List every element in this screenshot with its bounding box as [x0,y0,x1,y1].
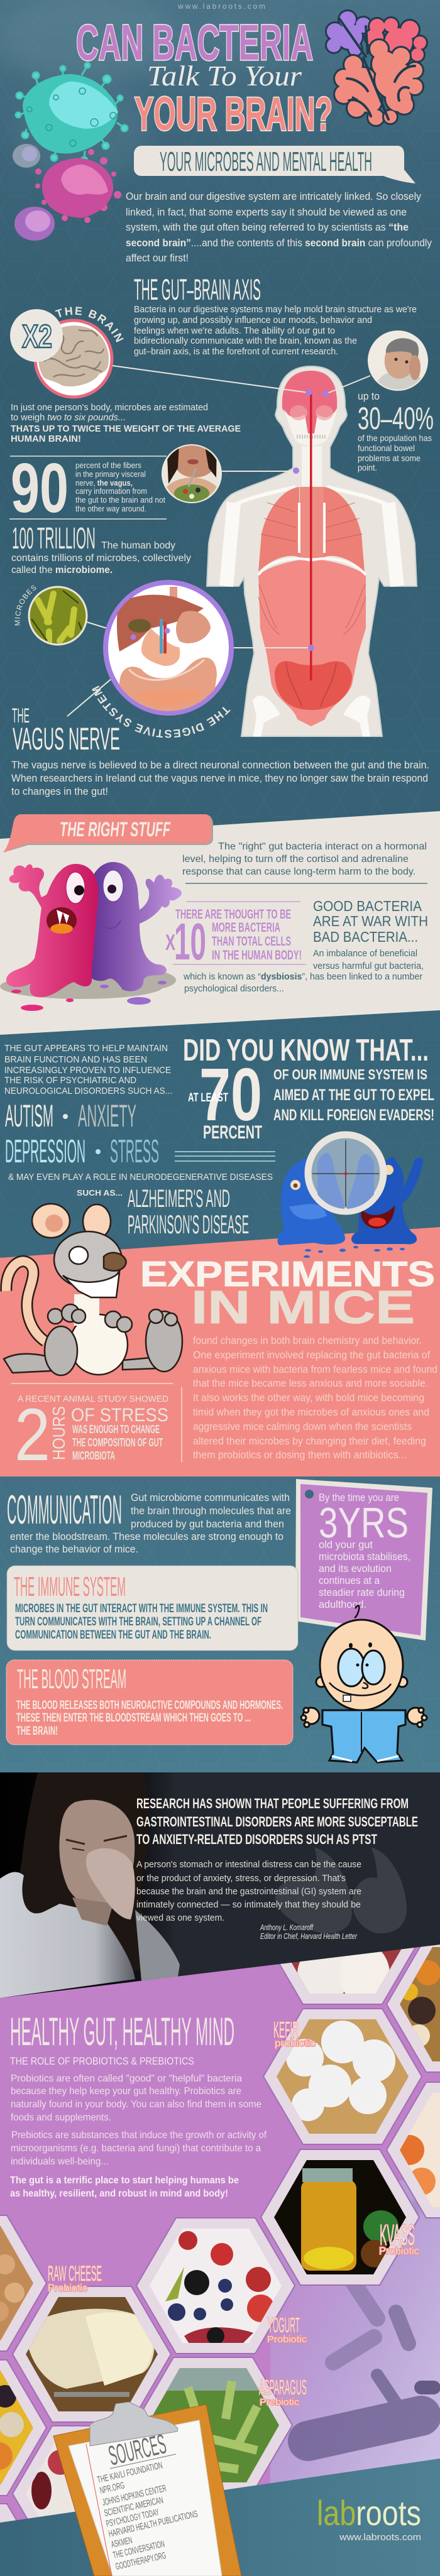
probiotics text: individuals well-being... [11,2156,109,2167]
stat: x10 more bacteria: THERE ARE THOUGHT TO BE [175,907,291,922]
limbs [4,1354,50,1373]
sources list: GOODTHERAPY.ORG [114,2550,167,2572]
quote text [136,1859,361,1923]
stat: 2 hours of stress: OF STRESS [71,1405,168,1426]
quote text: or the product of anxiety, stress, or depression. That's [136,1873,346,1884]
food labels: ASPARAGUS [259,2376,307,2399]
good vs bad bacteria: BAD BACTERIA... [313,929,418,945]
stat: 90 percent: the gut to the brain and not [75,496,166,505]
right blue monster [351,1156,423,1244]
panel: foods and probiotics background [0,1945,440,2523]
text: STRESS [110,1133,159,1170]
intro text: system, with the gut often being referred to by scientists as “the [126,221,409,233]
stat: 2 hours of stress: 2 [14,1394,50,1476]
intro text: linked, in fact, that some experts say it should be viewed as one [126,206,407,218]
sources list: SCIENTIFIC AMERICAN [103,2495,164,2519]
neck [72,1897,113,1926]
gut-brain axis text: bidirectionally communicate with the brain, known as the [134,336,357,346]
divider bottom [9,518,167,520]
communication text: change the behavior of mice. [10,1544,138,1555]
food labels: RAW CHEESE [48,2262,102,2286]
stat: 90 percent: nerve, the vagus, [75,479,133,488]
brain photo circle [35,320,112,397]
sources list: HARVARD HEALTH PUBLICATIONS [107,2509,199,2540]
stat: 2 hours of stress [14,1394,168,1476]
research headline [136,1796,418,1847]
metal clip [90,2402,178,2446]
mouse illustration [4,1204,182,1375]
quote text: intimately connected — so intimately that they should be [136,1899,361,1910]
vagus nerve line [310,394,312,680]
food hexagons [0,1869,440,2576]
intro text: affect our first! [126,252,189,264]
card: the blood stream: THE BRAIN! [16,1725,58,1738]
quote attribution: Editor in Chief, Harvard Health Letter [260,1931,357,1941]
hexagon: salad lower left [0,2360,47,2496]
stat: at least 70 percent [188,1053,262,1143]
title line 2 script: Talk To Your [147,60,302,92]
gut and disorders text [4,1044,172,1096]
logo: labroots: labroots [317,2493,421,2533]
experiments text: that the mice became less anxious and more sociable. [193,1378,428,1389]
quote attribution: Anthony L. Komaroff [260,1923,314,1932]
stat: 30-40%: of the population has [358,433,432,443]
intro copy [182,841,427,877]
sources list: JOHNS HOPKINS CENTER [101,2483,167,2508]
stat: 90 percent: the other way around. [75,505,146,513]
stat: 100 trillion: The human body [101,540,175,551]
good vs bad bacteria: GOOD BACTERIA [313,898,422,914]
pelvis bones [253,696,371,736]
hair back [11,1772,158,1973]
card: the immune system: THE IMMUNE SYSTEM [14,1571,126,1602]
card: the blood stream [6,1660,293,1745]
stat: x10 more bacteria: IN THE HUMAN BODY! [212,948,302,963]
probiotics text: because they help keep your gut healthy. Probiotics are [11,2086,241,2097]
experiments text: timid when they got the microbes of anxious ones and [193,1407,429,1418]
note: 3 years: steadier rate during [319,1587,405,1598]
purple monster [87,862,182,991]
quote marks [275,1847,407,1933]
experiments text: One experiment involved replacing the gut bacteria of [193,1350,430,1361]
brain lobe: purple [327,11,371,55]
microbes weight text: to weigh two to six pounds... [11,412,126,423]
stat: 100 trillion: called the microbiome. [11,565,113,576]
note: 3 years: By the time you are [319,1492,399,1504]
left blue monster [277,1157,345,1245]
background: teal upper section [0,0,440,1263]
probiotics text: naturally found in your body. You can also find them in some [11,2099,261,2110]
sources list: THE CONVERSATION [112,2538,166,2561]
food labels: Probiotic [48,2282,87,2294]
hexagon: kimchi [387,2082,440,2218]
microbes weight text: In just one person's body, microbes are estimated [11,402,208,413]
sources list: NPR.ORG [99,2480,126,2496]
microbes weight text: THATS UP TO TWICE THE WEIGHT OF THE AVERAGE [11,423,241,434]
closing statement: as healthy, resilient, and robust in mind and body! [10,2188,228,2199]
stat: x10 more bacteria [165,902,306,971]
x2 badge: X2 [22,319,52,355]
stat: x10 more bacteria: X [165,931,175,955]
stat: 30-40%: problems at some [358,453,421,463]
logo: labroots: www.labroots.com [339,2532,421,2543]
heading: experiments in mice: IN MICE [191,1281,415,1333]
closing statement [10,2175,239,2199]
neurodegenerative text [8,1172,273,1239]
microbes weight text: HUMAN BRAIN! [11,434,81,444]
note: 3 years: continues at a [319,1575,380,1586]
closing statement: The gut is a terrific place to start helping humans be [10,2175,239,2186]
intro text: Our brain and our digestive system are intricately linked. So closely [126,190,421,202]
lungs [258,487,300,572]
neurodegenerative text: SUCH AS... [77,1188,123,1198]
intro text [126,190,432,264]
stat: 100 trillion: contains trillions of microbes, collectively [11,553,191,564]
curved label: the brain: THE BRAIN [55,307,123,342]
hexagon: yogurt [136,2218,295,2354]
triple rule [175,1152,275,1161]
gut and disorders text: BRAIN FUNCTION AND HAS BEEN [4,1055,147,1065]
stat: x10 more bacteria: 10 [174,912,206,971]
note: 3 years: old your gut [319,1539,373,1551]
stat: 100 trillion [11,522,191,576]
subtitle speech bubble [134,146,415,183]
hand [86,1848,135,1919]
card: the immune system: TURN COMMUNICATES WITH THE BRAIN, SETTING UP A CHANNEL OF [15,1615,261,1629]
body illustration [207,366,417,736]
text: THE GUT–BRAIN AXIS [134,273,261,306]
gut-brain axis text: feelings when we're adults. The ability of our gut to [134,325,335,336]
bacteria rods backdrop [308,2193,434,2441]
immune system statement [273,1066,434,1124]
text: VAGUS NERVE [13,721,120,756]
stat: 2 hours of stress: MICROBIOTA [72,1449,115,1462]
stat: 90 percent: 90 [11,449,69,527]
food labels: probiotic [275,2038,316,2049]
disorders list: DEPRESSION [5,1133,85,1170]
probiotics text: Prebiotics are substances that induce the growth or activity of [11,2130,267,2141]
stat: 30-40% [358,390,434,472]
neurodegenerative text: ALZHEIMER'S AND [128,1185,230,1213]
purple marker dots [131,390,329,651]
stat: 2 hours of stress: THE COMPOSITION OF GUT [72,1436,163,1449]
brain lobe: salmon left [335,56,383,125]
food labels: Prebiotic [260,2397,300,2408]
card: the immune system: COMMUNICATION BETWEEN THE GUT AND THE BRAIN. [15,1629,211,1642]
food labels: KEFIR [273,2017,299,2043]
food labels [48,2017,419,2408]
heading: the vagus nerve [12,704,120,756]
sources list: THE KAVLI FOUNDATION [96,2460,163,2486]
stat: x10 more bacteria: THAN TOTAL CELLS [212,934,291,949]
stat: at least 70 percent: PERCENT [203,1122,262,1143]
gut-brain axis text [134,304,417,357]
panel: the right stuff [0,811,440,1035]
hexagon: kefir [263,2009,422,2144]
liver [117,595,204,652]
icon: colourful brain [327,11,426,125]
experiments text: It also works the other way, with bold mice becoming [193,1392,424,1404]
hexagon: small lower left [0,2504,47,2576]
probiotics text: microorganisms (e.g. bacteria and fungi) that contribute to a [11,2143,261,2154]
baby illustration [301,1605,427,1762]
belly [70,1314,128,1375]
good vs bad bacteria: psychological disorders... [184,983,284,994]
stat: at least 70 percent: AT LEAST [188,1091,228,1105]
heading bubble: THE RIGHT STUFF [60,818,171,841]
quote text: A person's stomach or intestinal distress can be the cause [136,1859,361,1870]
stat: 30-40%: up to [358,390,380,402]
stat: 90 percent [11,449,166,527]
stat: 90 percent: in the primary visceral [75,470,146,479]
panel: communication [0,1476,440,1772]
note: 3 years: adulthood. [319,1599,366,1610]
neurodegenerative text: & MAY EVEN PLAY A ROLE IN NEURODEGENERATIVE DISEASES [8,1172,273,1182]
stat: 100 trillion: 100 TRILLION [12,522,96,555]
hexagon: asparagus [134,2357,292,2493]
note: 3 years: 3YRS [319,1499,409,1547]
panel: footer [0,2402,440,2576]
note: 3 years: and its evolution [319,1563,392,1575]
gut-brain axis text: growing up, and possibly influence our moods, behavior and [134,315,372,325]
website url top: www.labroots.com [177,2,265,11]
panel: experiments in mice [0,1135,440,1476]
stat: 90 percent: carry information from [75,487,147,496]
experiments text: altered their microbes by changing their diet, feeding [193,1436,426,1447]
connector lines [67,366,370,716]
intro copy: level, helping to turn off the cortisol and adrenaline [182,854,409,865]
experiments text [193,1335,437,1461]
head [54,1231,122,1288]
microbes weight text [11,402,241,444]
sources list: PSYCHOLOGY TODAY [105,2507,160,2530]
note: 3 years: microbiota stabilises, [319,1551,410,1563]
gut and disorders text: THE GUT APPEARS TO HELP MAINTAIN [4,1044,168,1054]
experiments text: found changes in both brain chemistry and behavior. [193,1335,422,1346]
probiotics text: foods and supplements. [11,2112,111,2123]
heading: the vagus nerve: THE [12,704,30,727]
hexagon: natto [0,2215,47,2351]
quote attribution [260,1923,357,1941]
man photo circle [368,330,428,393]
communication text: enter the bloodstream. These molecules are strong enough to [10,1531,283,1542]
stat: 90 percent: percent of the fibers [75,461,141,470]
communication text: Gut microbiome communicates with [131,1492,290,1504]
gut and disorders text: INCREASINGLY PROVEN TO INFLUENCE [4,1066,171,1076]
experiments text: aggressive mice calming down when the scientists [193,1421,412,1433]
shirt [0,1872,135,1998]
card: the blood stream: THESE THEN ENTER THE BLOODSTREAM WHICH THEN GOES TO ... [16,1711,251,1725]
quote text: because the brain and the gastrointestinal (GI) system are [136,1886,361,1897]
experiments text: them probiotics or dosing them with antibiotics... [193,1449,407,1461]
panel: research quote dark section [0,1772,440,1998]
sources list: ASKMEN [110,2535,133,2550]
hexagon: garlic top [279,1948,416,2005]
disorders list [5,1098,159,1170]
communication text: the brain through molecules that are [131,1505,291,1517]
intro text: second brain”....and the contents of this second brain can profoundly [126,237,432,249]
heading: experiments in mice: EXPERIMENTS [140,1254,435,1294]
title [76,14,333,140]
probiotics text: Probiotics are often called "good" or "helpful" bacteria [11,2073,242,2084]
feet and hands [45,1326,77,1375]
gallbladder [128,619,151,633]
good vs bad bacteria: versus harmful gut bacteria, [313,961,424,971]
communication text: produced by gut bacteria and then [131,1519,284,1530]
microbes photo circle [28,587,88,647]
good vs bad bacteria [183,898,428,994]
hexagon: kvass [261,2149,419,2285]
heading: experiments in mice [140,1254,435,1333]
intestines [119,657,217,711]
vagus nerve text [11,759,429,797]
good vs bad bacteria: ARE AT WAR WITH [313,913,428,929]
magnifying glass [308,1135,383,1211]
icon: friendly monsters [0,862,182,1011]
sources list: SOURCES [106,2428,169,2472]
stat: x10 more bacteria: MORE BACTERIA [212,920,280,935]
pelvic organ [275,661,352,710]
stat: 2 hours of stress: HOURS [49,1406,69,1460]
white arm and collar bones [226,487,397,586]
panel: communication: COMMUNICATION [7,1487,122,1532]
goo puddles [21,1005,43,1011]
intro copy: The "right" gut bacteria interact on a hormonal [218,841,427,852]
quote text: viewed as one system. [136,1913,224,1923]
gut and disorders text: NEUROLOGICAL DISORDERS SUCH AS... [4,1086,172,1096]
digestive system circle [106,582,231,713]
communication text [10,1492,291,1555]
icon: magenta bacterium [36,150,121,222]
intro copy: response that can cause long-term harm to the body. [182,866,415,877]
x2 badge [10,309,63,362]
icon: teal bacterium [16,63,128,163]
icon: small grey bacterium [13,144,40,168]
stat: 30-40%: functional bowel [358,443,415,453]
disorders list: AUTISM [5,1098,53,1133]
brain lobe: red [366,18,426,61]
heading bubble [3,814,213,853]
text: PARKINSON'S DISEASE [128,1209,249,1239]
stat: at least 70 percent: 70 [199,1053,262,1137]
gut and disorders text: THE RISK OF PSYCHIATRIC AND [4,1076,136,1086]
hexagon: cheese [13,2286,171,2422]
woman photo [0,1772,180,1998]
hexagon: garlic lower [12,2425,89,2519]
goo droplets [304,1246,405,1258]
icon: small purple bacterium [14,207,55,241]
food labels: YOGURT [268,2313,300,2337]
curved label: microbes: MICROBES [15,586,36,626]
food labels: Probiotic [379,2245,419,2257]
brain lobe: salmon right [370,40,422,123]
clipboard [53,2402,241,2576]
hexagon: salad top right [387,1936,440,2072]
sources list [96,2428,199,2572]
stat: 2 hours of stress: A RECENT ANIMAL STUDY SHOWED [18,1394,168,1404]
note: 3 years [295,1479,432,1640]
stomach [176,611,211,643]
blue monsters with magnifier [277,1135,423,1258]
stat: 2 hours of stress: WAS ENOUGH TO CHANGE [72,1423,160,1436]
probiotics text [11,2073,267,2167]
gut-brain axis text: Bacteria in our digestive systems may help mold brain structure as we're [134,304,417,315]
good vs bad bacteria: An imbalance of beneficial [313,948,417,959]
good vs bad bacteria: which is known as “dysbiosis”, has been linked to a number [183,971,422,982]
body silhouette [207,366,417,736]
salad photo circle [162,443,222,506]
disorders list: ANXIETY [78,1098,136,1133]
card: the immune system [7,1566,298,1651]
food labels: Probiotic [267,2334,307,2345]
divider top [10,456,167,457]
abdomen organs [258,559,366,726]
stat: 30-40%: point. [358,462,377,472]
card: the immune system: MICROBES IN THE GUT INTERACT WITH THE IMMUNE SYSTEM. THIS IN [15,1602,268,1615]
face [59,1800,135,1908]
gut-brain axis text: gut–brain axis, is at the forefront of current research. [134,346,338,357]
pink monster [6,864,98,997]
vagus nerve text: to changes in the gut! [11,785,108,797]
diaphragm [258,503,366,575]
subheading: role of probiotics: THE ROLE OF PROBIOTICS & PREBIOTICS [10,2055,194,2067]
curved label: the digestive system: THE DIGESTIVE SYSTEM [92,685,231,738]
card: the blood stream: THE BLOOD STREAM [17,1664,126,1695]
